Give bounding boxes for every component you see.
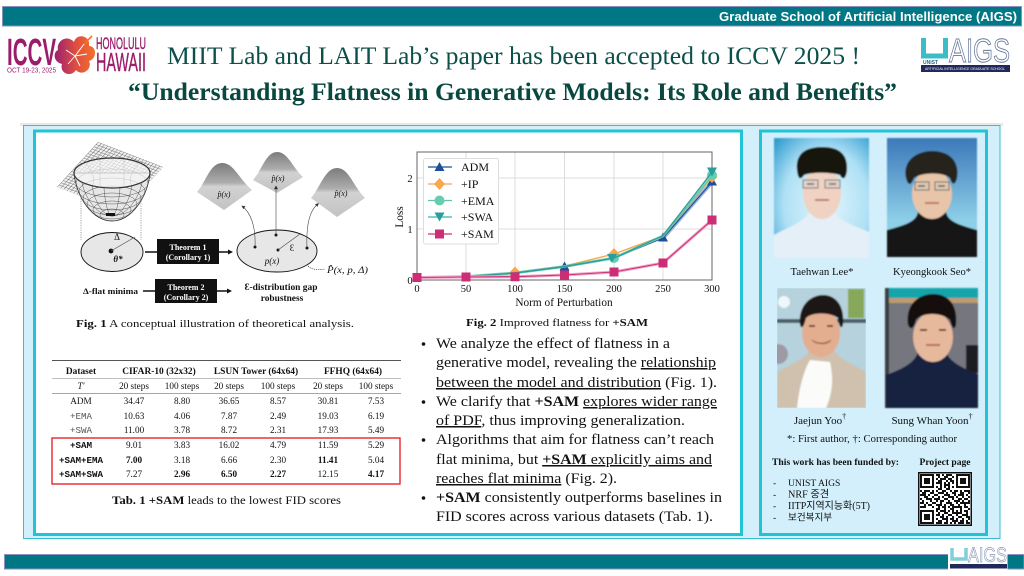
table row SWA: 17.93 — [318, 425, 339, 435]
distribution ellipse — [237, 230, 317, 272]
logo: UNIST AIGS — [921, 32, 1010, 72]
table row SAM: 4.79 — [270, 440, 286, 450]
axis tick labels: 200 — [606, 284, 622, 295]
bullet list: key findings — [422, 335, 722, 525]
flat minima ellipse: θ* — [113, 254, 123, 264]
table row SAM: 3.83 — [174, 440, 190, 450]
funding list — [773, 478, 870, 524]
table row SAM: 11.59 — [318, 440, 339, 450]
table row SAM+SWA: 12.15 — [318, 469, 339, 479]
axis tick labels: 50 — [461, 284, 471, 295]
legend: +EMA: +EMA — [461, 194, 495, 208]
table row SAM — [70, 440, 384, 451]
legend: +IP: +IP — [461, 177, 479, 191]
surface: generated density middle: p̂(x) — [271, 174, 285, 183]
table steps row: 100 steps — [359, 381, 394, 391]
announcement heading: MIIT Lab and LAIT Lab’s paper has been accepted to ICCV 2025 ! — [167, 41, 860, 70]
author footnote: *: First author, †: Corresponding author — [787, 433, 957, 445]
table row EMA: 4.06 — [174, 411, 190, 421]
author name: Sung Whan Yoon: † — [969, 412, 973, 421]
table row SWA: 3.78 — [174, 425, 190, 435]
table row ADM: 34.47 — [124, 396, 145, 406]
photo: Taehwan Lee — [774, 138, 869, 258]
table row SWA: 8.72 — [221, 425, 237, 435]
table row EMA: 10.63 — [124, 411, 145, 421]
surface: generated density left — [197, 163, 252, 210]
theorem 1 box: (Corollary 1) — [166, 253, 211, 262]
photo: Sung Whan Yoon — [885, 288, 978, 408]
table row SAM: 9.01 — [126, 440, 142, 450]
distribution ellipse: p(x) — [264, 256, 279, 266]
QR code — [918, 472, 972, 526]
distribution ellipse: Ɛ — [290, 243, 295, 253]
author name: Sung Whan Yoon: Sung Whan Yoon — [891, 415, 969, 427]
photo: Jaejun Yoo — [768, 288, 866, 408]
table row SAM+EMA: 3.18 — [174, 455, 190, 465]
table steps row: 20 steps — [313, 381, 343, 391]
theorem 2 box: (Corollary 2) — [164, 293, 209, 302]
table row ADM — [70, 396, 384, 406]
funding list: - — [773, 501, 776, 512]
axis tick labels: 0 — [407, 276, 413, 287]
axis tick labels — [407, 174, 720, 295]
distribution set label: P̂(x, p, Δ) — [326, 263, 368, 276]
table row SAM+SWA: 7.27 — [126, 469, 142, 479]
table row ADM: 30.81 — [318, 396, 339, 406]
table row SWA: 11.00 — [124, 425, 145, 435]
series: ADM — [417, 176, 717, 278]
arrow: theorem 1 — [145, 250, 233, 254]
table steps row: 100 steps — [261, 381, 296, 391]
table header: CIFAR-10 (32x32) — [122, 366, 196, 377]
panel: authors — [760, 131, 986, 534]
theorem 1 box — [157, 239, 219, 264]
logo: ICCV 2025 Honolulu Hawaii — [7, 32, 146, 77]
legend: ADM: ADM — [461, 160, 489, 174]
robustness label: Ɛ-distribution gap — [244, 282, 318, 292]
table row SAM+EMA: 5.04 — [368, 455, 384, 465]
surface: generated density right: p̂(x) — [334, 189, 348, 198]
bullet 3 — [422, 431, 714, 487]
top banner — [2, 6, 1022, 26]
red highlight box — [52, 438, 400, 484]
Hawaii text: HAWAII — [96, 47, 146, 77]
bullet 3: flat minima, but +SAM explicitly aims and — [436, 451, 712, 468]
figure 1: conceptual illustration — [57, 142, 368, 304]
y axis title: Loss — [394, 206, 406, 228]
table row EMA: 6.19 — [368, 411, 384, 421]
author name: Jaejun Yoo: † — [842, 412, 846, 421]
figure 2 caption: Fig. 2 Improved flatness for +SAM — [466, 317, 649, 329]
axis tick labels: 2 — [407, 174, 413, 185]
table steps row — [77, 381, 394, 391]
wireframe bowl — [74, 158, 150, 221]
x axis title: Norm of Perturbation — [515, 297, 613, 309]
theorem 1 box: Theorem 1 — [170, 243, 206, 252]
table row SAM+SWA: 6.50 — [221, 469, 237, 479]
table row SAM+EMA: 7.00 — [126, 455, 142, 465]
funding list: IITP지역지능화(5T) — [788, 500, 870, 512]
table row SAM+EMA: 2.30 — [270, 455, 286, 465]
bullet 2 — [422, 393, 717, 429]
bullet 4 — [422, 489, 722, 525]
arrows: samples to densities — [242, 186, 318, 248]
paper title: “Understanding Flatness in Generative Models: Its Role and Benefits” — [128, 77, 897, 106]
table row EMA — [70, 411, 384, 422]
logo strap: ARTIFICIAL INTELLIGENCE GRADUATE SCHOOL — [925, 67, 1005, 71]
project page label: Project page — [920, 458, 970, 468]
bullet 1 — [422, 335, 717, 391]
table header: Dataset — [66, 367, 97, 377]
flat minima ellipse — [81, 232, 143, 272]
ICCV wordmark: ICCV — [7, 32, 56, 74]
table row SWA: 2.31 — [270, 425, 286, 435]
table row SAM+SWA: 4.17 — [368, 469, 384, 479]
bullet 1: We analyze the effect of flatness in a — [436, 335, 670, 352]
table: FID scores — [52, 360, 401, 484]
table row ADM: 8.57 — [270, 396, 286, 406]
theorem 2 box: Theorem 2 — [168, 283, 204, 292]
logo: UNIST AIGS footer — [948, 544, 1008, 570]
footer logo strap — [950, 564, 1007, 568]
photo: Kyeongkook Seo — [887, 138, 977, 257]
footer U mark — [952, 548, 966, 559]
table header — [66, 366, 382, 377]
surface: generated density left: p̂(x) — [217, 190, 231, 199]
footer AIGS wordmark: AIGS — [968, 544, 1007, 567]
surface: generated density middle — [253, 152, 303, 193]
panel: outer background — [20, 123, 1003, 538]
table row SAM+EMA — [59, 455, 384, 466]
funding heading: This work has been funded by: — [772, 458, 899, 468]
table row ADM: ADM — [70, 396, 92, 406]
bullet 4: +SAM consistently outperforms baselines in — [436, 489, 722, 506]
table row EMA: 2.49 — [270, 411, 286, 421]
banner label: Graduate School of Artificial Intelligence (AIGS) — [719, 9, 1017, 24]
table row SAM+EMA: 6.66 — [221, 455, 237, 465]
table steps row: T′ — [77, 381, 86, 391]
flat grid plane — [57, 142, 163, 212]
icon: hibiscus flower — [55, 36, 95, 74]
table row SAM+EMA: +SAM+EMA — [59, 455, 104, 466]
series: +SAM — [412, 216, 716, 282]
bullet 3: reaches flat minima (Fig. 2). — [436, 470, 617, 487]
Honolulu text: HONOLULU — [96, 34, 146, 53]
legend — [424, 158, 498, 244]
ICCV dates: OCT 19-23, 2025 — [7, 68, 56, 74]
bullet 2: We clarify that +SAM explores wider range — [436, 393, 717, 410]
legend: +SAM: +SAM — [461, 227, 494, 241]
table row EMA: 7.87 — [221, 411, 237, 421]
distribution set label — [308, 263, 368, 276]
table row SWA — [70, 425, 384, 436]
table row SAM+SWA: 2.27 — [270, 469, 286, 479]
table row SAM: +SAM — [70, 440, 93, 451]
bottom banner — [4, 554, 1024, 569]
series: +IP — [417, 171, 718, 278]
surface: generated density right — [311, 168, 365, 217]
series: +SWA — [417, 168, 717, 278]
table row SWA: 5.49 — [368, 425, 384, 435]
series: +EMA — [417, 170, 717, 278]
delta-flat minima label: Δ-flat minima — [83, 286, 139, 296]
bullet 1: generative model, revealing the relationship — [436, 354, 716, 371]
table row SAM+SWA — [59, 469, 384, 480]
table row SAM+SWA: +SAM+SWA — [59, 469, 104, 480]
theorem 2 box — [155, 279, 217, 303]
table row EMA: +EMA — [70, 411, 93, 422]
author name: Kyeongkook Seo: Kyeongkook Seo* — [893, 266, 971, 278]
U mark — [924, 38, 946, 56]
UNIST caption: UNIST — [923, 60, 938, 66]
funding list: - — [773, 490, 776, 500]
robustness label — [244, 282, 318, 304]
axis tick labels: 1 — [407, 225, 413, 236]
table header: FFHQ (64x64) — [324, 366, 382, 377]
axis tick labels: 0 — [414, 284, 420, 295]
projection guide lines — [81, 196, 141, 240]
bullet 4: FID scores across various datasets (Tab. 1). — [436, 508, 713, 525]
funding list: UNIST AIGS — [788, 478, 840, 489]
author name: Jaejun Yoo: Jaejun Yoo — [794, 415, 842, 427]
bullet 1: between the model and distribution (Fig. 1). — [436, 374, 717, 391]
table row ADM: 36.65 — [219, 396, 240, 406]
table row EMA: 19.03 — [318, 411, 339, 421]
funding list: 보건복지부 — [788, 512, 832, 524]
panel: main content — [34, 131, 742, 534]
author name: Taehwan Lee: Taehwan Lee* — [790, 266, 854, 278]
funding list: NRF 중견 — [788, 488, 829, 500]
funding list: - — [773, 512, 776, 524]
funding list: - — [773, 478, 776, 489]
axis tick labels: 250 — [655, 284, 671, 295]
axis tick labels: 300 — [704, 284, 720, 295]
table row SAM: 16.02 — [219, 440, 240, 450]
table row SAM+SWA: 2.96 — [174, 469, 190, 479]
table row SWA: +SWA — [70, 425, 93, 436]
axis tick labels: 100 — [507, 284, 523, 295]
table steps row: 20 steps — [214, 381, 244, 391]
table row ADM: 7.53 — [368, 396, 384, 406]
table row ADM: 8.80 — [174, 396, 190, 406]
arrow: theorem 2 — [143, 288, 232, 294]
plot grid and frame — [417, 152, 712, 280]
legend: +SWA: +SWA — [461, 210, 493, 224]
table header: LSUN Tower (64x64) — [214, 366, 298, 377]
line chart: loss vs norm of perturbation — [394, 152, 720, 309]
bullet 3: Algorithms that aim for flatness can’t reach — [436, 431, 714, 448]
table caption: Tab. 1 +SAM leads to the lowest FID scores — [112, 495, 341, 507]
table row SAM+EMA: 11.41 — [318, 455, 338, 465]
table steps row: 100 steps — [165, 381, 200, 391]
robustness label: robustness — [261, 294, 304, 304]
figure 1 caption: Fig. 1 A conceptual illustration of theoretical analysis. — [76, 318, 354, 330]
axis tick labels: 150 — [557, 284, 572, 295]
bullet 2: of PDF, thus improving generalization. — [436, 412, 685, 429]
table row SAM: 5.29 — [368, 440, 384, 450]
flat minima ellipse: Δ — [114, 232, 120, 242]
table steps row: 20 steps — [119, 381, 149, 391]
